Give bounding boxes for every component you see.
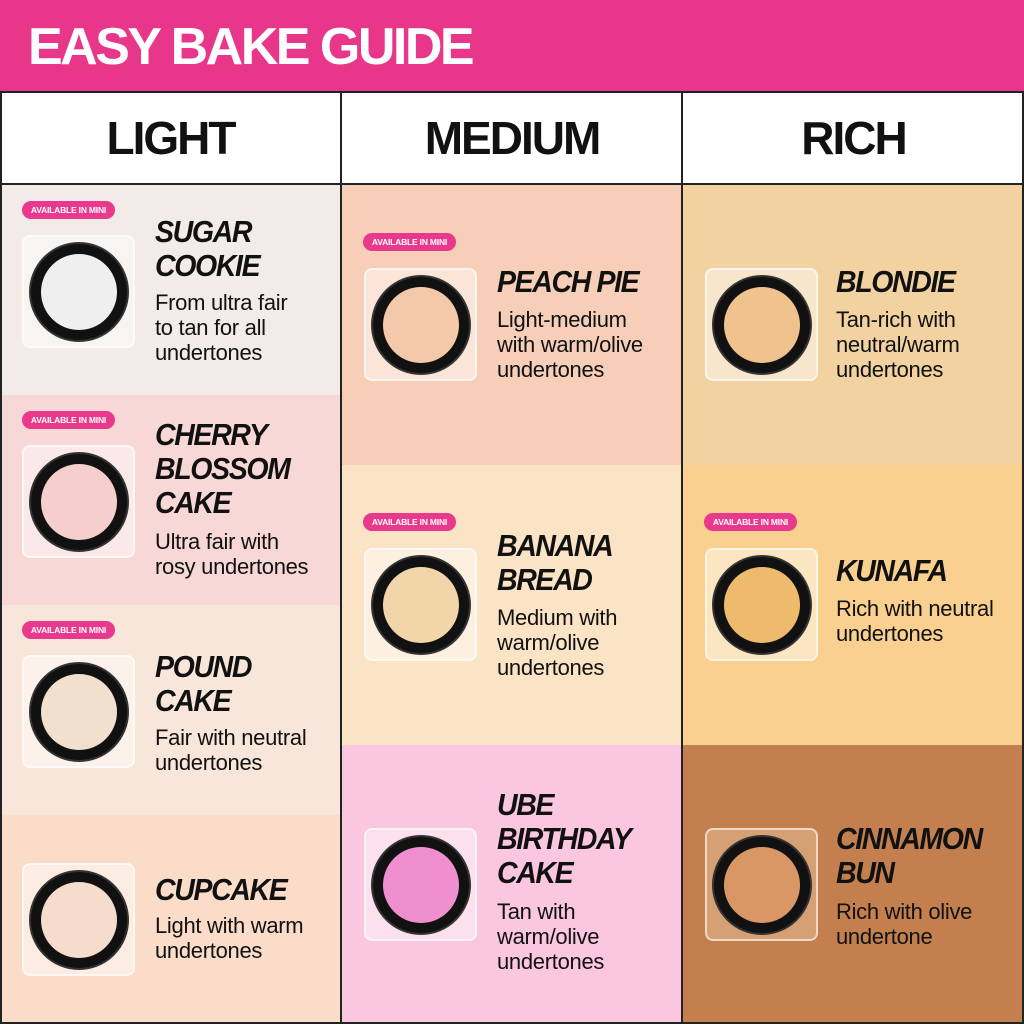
panel: sugar cookie: SUGAR	[155, 214, 251, 249]
panel: cinnamon bun	[683, 745, 1024, 1024]
panel: sugar cookie: COOKIE	[155, 248, 259, 283]
panel: ube birthday cake: Tan with	[497, 899, 575, 924]
icon: ube compact	[364, 828, 477, 941]
panel: ube birthday cake: undertones	[497, 949, 604, 974]
panel: sugar cookie: AVAILABLE IN MINI	[31, 205, 106, 215]
icon: banana compact	[364, 548, 477, 661]
column heading: rich: RICH	[801, 112, 906, 164]
panel: pound cake	[0, 605, 341, 815]
panel: cinnamon bun: undertone	[836, 924, 932, 949]
panel: banana bread: AVAILABLE IN MINI	[372, 517, 447, 527]
panel: blondie: Tan-rich with	[836, 307, 956, 332]
panel: pound cake: AVAILABLE IN MINI	[31, 625, 106, 635]
panel: sugar cookie: to tan for all	[155, 315, 266, 340]
panel: banana bread: BREAD	[497, 562, 592, 597]
icon: cherry compact	[22, 445, 135, 558]
header banner	[0, 0, 1024, 92]
panel: pound cake: Fair with neutral	[155, 725, 306, 750]
column heading: light: LIGHT	[106, 112, 234, 164]
column heading: medium: MEDIUM	[425, 112, 599, 164]
panel: peach pie: PEACH PIE	[497, 264, 638, 299]
panel: cherry blossom cake: AVAILABLE IN MINI	[31, 415, 106, 425]
panel: banana bread	[342, 465, 682, 745]
panel: ube birthday cake	[342, 745, 682, 1024]
panel: cinnamon bun: Rich with olive	[836, 899, 972, 924]
panel: cupcake: Light with warm	[155, 913, 303, 938]
panel: ube birthday cake: UBE	[497, 787, 553, 822]
grid lines	[0, 91, 1024, 93]
panel: pound cake: POUND	[155, 649, 251, 684]
icon: peach compact	[364, 268, 477, 381]
panel: blondie	[683, 185, 1024, 465]
column heading: medium	[342, 92, 682, 185]
column heading: light	[0, 92, 341, 185]
panel: kunafa: KUNAFA	[836, 553, 947, 588]
panel: banana bread: warm/olive	[497, 630, 599, 655]
panel: banana bread: undertones	[497, 655, 604, 680]
panel: cherry blossom cake: CHERRY	[155, 417, 267, 452]
panel: cinnamon bun: CINNAMON	[836, 821, 982, 856]
icon: blondie compact	[705, 268, 818, 381]
panel: cherry blossom cake	[0, 395, 341, 605]
panel: cupcake	[0, 815, 341, 1024]
panel: ube birthday cake: warm/olive	[497, 924, 599, 949]
panel: banana bread: BANANA	[497, 528, 612, 563]
title: EASY BAKE GUIDE	[28, 18, 472, 76]
panel: blondie: neutral/warm	[836, 332, 960, 357]
icon: sugar cookie compact	[22, 235, 135, 348]
panel: blondie: undertones	[836, 357, 943, 382]
panel: kunafa	[683, 465, 1024, 745]
icon: pound compact	[22, 655, 135, 768]
panel: blondie: BLONDIE	[836, 264, 955, 299]
panel: kunafa: AVAILABLE IN MINI	[713, 517, 788, 527]
panel: cherry blossom cake: Ultra fair with	[155, 529, 279, 554]
column heading: rich	[683, 92, 1024, 185]
panel: pound cake: CAKE	[155, 683, 230, 718]
panel: cupcake: CUPCAKE	[155, 872, 286, 907]
panel: peach pie: with warm/olive	[497, 332, 643, 357]
icon: cinnamon compact	[705, 828, 818, 941]
icon: cupcake compact	[22, 863, 135, 976]
panel: kunafa: Rich with neutral	[836, 596, 994, 621]
panel: sugar cookie: From ultra fair	[155, 290, 287, 315]
panel: cupcake: undertones	[155, 938, 262, 963]
panel: ube birthday cake: CAKE	[497, 855, 572, 890]
panel: pound cake: undertones	[155, 750, 262, 775]
panel: cherry blossom cake: BLOSSOM	[155, 451, 290, 486]
panel: banana bread: Medium with	[497, 605, 617, 630]
panel: cherry blossom cake: CAKE	[155, 485, 230, 520]
panel: peach pie: AVAILABLE IN MINI	[372, 237, 447, 247]
panel: sugar cookie	[0, 185, 341, 395]
icon: kunafa compact	[705, 548, 818, 661]
panel: cherry blossom cake: rosy undertones	[155, 554, 308, 579]
panel: kunafa: undertones	[836, 621, 943, 646]
panel: peach pie: undertones	[497, 357, 604, 382]
panel: peach pie: Light-medium	[497, 307, 627, 332]
panel: ube birthday cake: BIRTHDAY	[497, 821, 631, 856]
panel: peach pie	[342, 185, 682, 465]
panel: sugar cookie: undertones	[155, 340, 262, 365]
panel: cinnamon bun: BUN	[836, 855, 894, 890]
